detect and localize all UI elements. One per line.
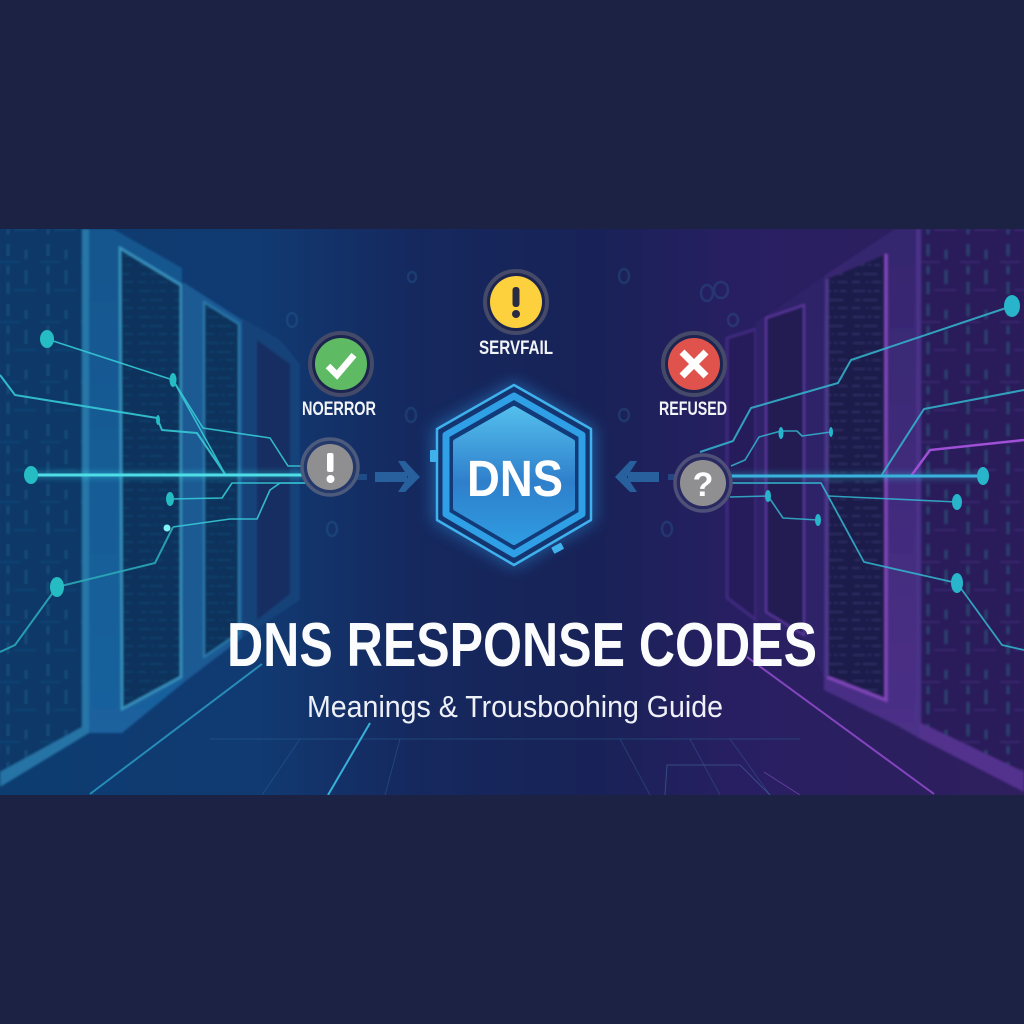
status: gray unknown: ?: [693, 466, 713, 504]
hero band: [0, 229, 1024, 795]
status: gray unknown: [675, 455, 731, 511]
status: REFUSED: REFUSED: [659, 399, 727, 420]
left arrow into DNS hexagon: [350, 461, 420, 492]
status: SERVFAIL: SERVFAIL: [479, 338, 553, 359]
circuit lines right: [700, 295, 1024, 650]
circuit lines left: [0, 330, 312, 652]
left server racks: [0, 229, 300, 787]
status: gray warning: [302, 439, 358, 495]
title: DNS RESPONSE CODES: [227, 611, 817, 680]
background data rings: [287, 269, 738, 536]
status: NOERROR: [302, 333, 376, 420]
floor: [210, 739, 800, 795]
status: SERVFAIL: [479, 271, 553, 359]
right server racks: [727, 229, 1024, 792]
floor light streaks: [90, 657, 934, 795]
subtitle: Meanings & Trousboohing Guide: [307, 689, 723, 724]
right arrow into DNS hexagon: [615, 461, 682, 492]
DNS hexagon: [430, 382, 595, 568]
status: REFUSED: [659, 333, 727, 420]
status: NOERROR: NOERROR: [302, 399, 376, 420]
DNS label: DNS: [467, 450, 563, 507]
